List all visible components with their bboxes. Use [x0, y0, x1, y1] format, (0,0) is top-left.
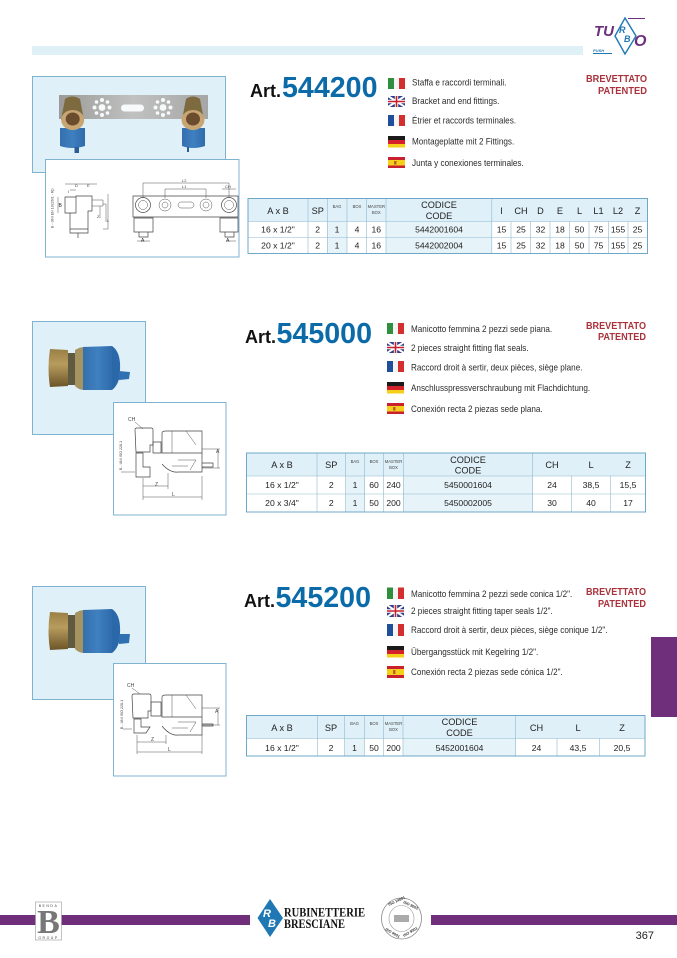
multilingual description: Manicotto femmina 2 pezzi sede conica 1/2". — [411, 589, 572, 599]
table: 544200 dimensions: 25 — [516, 240, 526, 250]
logo: Rubinetterie Bresciane: R — [263, 908, 271, 920]
article heading: 545200 — [276, 582, 371, 614]
table: 545200 dimensions: Z — [619, 723, 625, 733]
table: 544200 dimensions: 15 — [497, 224, 506, 234]
table: 544200 dimensions: 32 — [536, 240, 545, 250]
table: 545000 dimensions: 38,5 — [583, 480, 600, 490]
table: 545000 dimensions: MASTER — [385, 459, 402, 464]
table: 545200 dimensions: SP — [325, 723, 337, 733]
technical drawing panel: bracket: L — [107, 218, 110, 223]
table: 544200 dimensions: 50 — [575, 224, 584, 234]
table: 544200 dimensions: 20 x 1/2" — [261, 240, 295, 250]
technical drawing panel: taper fitting: L — [168, 747, 171, 753]
logo: B group: BENDA — [39, 904, 58, 908]
multilingual description: Manicotto femmina 2 pezzi sede piana. — [411, 324, 552, 334]
table: 544200 dimensions: Z — [635, 206, 641, 216]
table: 544200 dimensions: 75 — [594, 224, 603, 234]
table: 544200 dimensions: 5442002004 — [415, 240, 463, 250]
technical drawing panel: bracket: B — [58, 203, 62, 209]
logo: B group: GROUP — [38, 936, 59, 940]
table: 545000 dimensions: 20 x 3/4" — [265, 498, 299, 508]
table: 545000 dimensions — [246, 453, 646, 512]
technical drawing panel: bracket: L1 — [182, 184, 187, 189]
table: 545000 dimensions: CH — [545, 460, 559, 470]
table: 545000 dimensions: 1 — [353, 480, 358, 490]
multilingual description — [412, 77, 524, 168]
logo: Turbo Push: B — [624, 34, 631, 44]
table: 544200 dimensions: 32 — [536, 224, 545, 234]
multilingual description: Montageplatte mit 2 Fittings. — [412, 136, 514, 147]
table: 544200 dimensions: CODICE — [421, 200, 457, 210]
footer purple bar left — [0, 915, 250, 925]
multilingual description: Conexión recta 2 piezas sede cónica 1/2". — [411, 667, 563, 677]
flag: Italy — [387, 588, 404, 599]
patent label: BREVETTATO — [586, 586, 646, 598]
multilingual description — [411, 324, 590, 414]
technical drawing panel: bracket: D — [75, 183, 78, 188]
flag: UK — [388, 96, 405, 107]
table: 544200 dimensions: I — [500, 206, 503, 216]
logo: Rubinetterie Bresciane: B — [268, 918, 276, 930]
table: 544200 dimensions — [248, 198, 648, 254]
table: 545000 dimensions: BOX — [389, 465, 398, 470]
multilingual description: Conexión recta 2 piezas sede plana. — [411, 404, 543, 414]
section: Art. 545200 — [32, 582, 646, 776]
table: 545000 dimensions: 50 — [369, 498, 379, 508]
flag: Spain — [387, 403, 404, 414]
table: 544200 dimensions: 4 — [355, 224, 360, 234]
table: 545000 dimensions: BOX — [370, 459, 379, 464]
technical drawing panel: bracket — [46, 160, 239, 257]
logo: Turbo Push: PUSH — [593, 48, 604, 53]
table: 545000 dimensions: 5450001604 — [444, 480, 492, 490]
flag: France — [387, 624, 404, 636]
table: 544200 dimensions: 25 — [633, 224, 642, 234]
logo: Rubinetterie Bresciane — [258, 899, 365, 937]
photo panel: straight fitting — [32, 322, 146, 434]
table: 545200 dimensions: 24 — [532, 743, 541, 753]
photo panel: taper fitting — [32, 586, 146, 700]
table: 545200 dimensions: MASTER — [385, 721, 402, 726]
multilingual description: Staffa e raccordi terminali. — [412, 77, 506, 88]
technical drawing panel: bracket: L2 — [182, 178, 187, 183]
section: Art. 544200 — [32, 72, 648, 257]
patent label: PATENTED — [598, 331, 646, 343]
technical drawing panel: straight fitting: CH — [128, 417, 136, 423]
technical drawing panel: straight fitting: Z — [155, 482, 158, 488]
logo: Turbo Push: TU — [594, 23, 615, 40]
table: 544200 dimensions: SP — [312, 206, 324, 216]
table: 545000 dimensions: 16 x 1/2" — [265, 480, 299, 490]
multilingual description: Bracket and end fittings. — [412, 96, 499, 106]
multilingual description: 2 pieces straight fitting taper seals 1/2". — [411, 606, 553, 616]
flag: Spain — [388, 157, 405, 168]
table: 544200 dimensions: 16 x 1/2" — [261, 224, 295, 234]
table: 544200 dimensions: 25 — [516, 224, 526, 234]
technical drawing panel: bracket: CH — [225, 184, 231, 189]
patent label — [586, 586, 646, 610]
table: 545000 dimensions: CODICE — [450, 455, 486, 465]
table: 545000 dimensions: 17 — [623, 498, 633, 508]
table: 545200 dimensions: BOX — [370, 721, 379, 726]
table: 544200 dimensions: MASTER — [368, 204, 385, 209]
technical drawing panel: bracket: E — [87, 183, 90, 188]
article heading: Art. — [250, 81, 281, 101]
article heading: Art. — [244, 591, 275, 611]
table: 545200 dimensions: 43,5 — [570, 743, 587, 753]
table: 545000 dimensions: SP — [325, 460, 337, 470]
top header bar — [32, 46, 583, 55]
article heading: 545000 — [276, 318, 372, 350]
technical drawing panel: straight fitting: L — [172, 492, 175, 498]
table: 544200 dimensions: L1 — [593, 206, 604, 216]
patent label: PATENTED — [598, 598, 646, 610]
table: 544200 dimensions: 25 — [633, 240, 642, 250]
technical drawing panel: bracket: Z — [97, 214, 100, 219]
technical drawing panel: bracket: B - UNI EN 10226/1 - Rp — [50, 188, 54, 228]
logo: Rubinetterie Bresciane: RUBINETTERIE — [284, 906, 365, 920]
table: 545200 dimensions: BAG — [350, 721, 359, 726]
logo: ISO certification seal: ISO 9001 — [402, 926, 418, 938]
flag: UK — [387, 605, 404, 617]
patent label: PATENTED — [598, 85, 647, 97]
table: 545000 dimensions: 240 — [386, 480, 401, 490]
table: 544200 dimensions: 155 — [611, 224, 625, 234]
table: 544200 dimensions: E — [557, 206, 563, 216]
table: 545000 dimensions: 30 — [547, 498, 557, 508]
technical drawing panel: straight fitting: A — [216, 449, 220, 455]
technical drawing panel: taper fitting: Z — [151, 737, 154, 743]
page number: 367 — [636, 930, 654, 942]
table: 545200 dimensions: 1 — [352, 743, 357, 753]
logo: ISO certification seal: ISO 14001 — [388, 896, 406, 907]
flag: Germany — [387, 382, 404, 394]
patent label: BREVETTATO — [586, 320, 646, 332]
technical drawing panel: straight fitting: B - UNI ISO 228-1 — [119, 441, 123, 470]
article heading: 544200 — [282, 72, 378, 104]
section: Art. 545000 — [32, 318, 646, 515]
footer purple bar right — [431, 915, 677, 925]
multilingual description: Étrier et raccords terminales. — [412, 115, 516, 126]
table: 544200 dimensions: CH — [514, 206, 528, 216]
table: 544200 dimensions: 15 — [497, 240, 506, 250]
table: 545200 dimensions: A x B — [271, 723, 293, 733]
table: 544200 dimensions: BAG — [333, 204, 341, 209]
table: 545200 dimensions: CH — [530, 723, 543, 733]
logo: ISO certification seal — [382, 896, 422, 939]
table: 544200 dimensions: 2 — [315, 224, 320, 234]
table: 544200 dimensions: 18 — [555, 240, 565, 250]
technical drawing panel: bracket: I — [68, 189, 69, 194]
table: 545000 dimensions: 15,5 — [620, 480, 637, 490]
multilingual description: Raccord droit à sertir, deux pièces, siège plane. — [411, 362, 582, 373]
multilingual description: Raccord droit à sertir, deux pièces, siège conique 1/2". — [411, 625, 608, 635]
logo: Turbo Push: R — [619, 25, 626, 35]
table: 545200 dimensions: 50 — [369, 743, 379, 753]
logo: B group: B — [37, 904, 60, 941]
table: 545200 dimensions: L — [575, 723, 581, 733]
flag: Italy — [388, 78, 405, 89]
table: 544200 dimensions: CODE — [426, 211, 452, 221]
table: 544200 dimensions: 16 — [372, 240, 381, 250]
logo: Turbo Push: O — [634, 33, 647, 50]
multilingual description: 2 pieces straight fitting flat seals. — [411, 343, 529, 353]
table: 544200 dimensions: 16 — [372, 224, 381, 234]
table: 544200 dimensions: 155 — [611, 240, 625, 250]
table: 545200 dimensions: 16 x 1/2" — [265, 743, 299, 753]
table: 544200 dimensions: D — [537, 206, 544, 216]
technical drawing panel: taper fitting — [114, 664, 226, 776]
technical drawing panel: bracket: A — [141, 238, 145, 244]
table: 545200 dimensions: 20,5 — [614, 743, 631, 753]
patent label — [586, 73, 647, 97]
flag: Spain — [387, 666, 404, 678]
flag: UK — [387, 342, 404, 353]
flag: Italy — [387, 323, 404, 334]
table: 545000 dimensions: A x B — [271, 460, 293, 470]
table: 545000 dimensions: 2 — [329, 480, 334, 490]
multilingual description: Junta y conexiones terminales. — [412, 158, 524, 168]
technical drawing panel: taper fitting: B - UNI ISO 228-1 — [120, 700, 124, 729]
photo panel: bracket with fittings — [32, 76, 226, 172]
technical drawing panel: straight fitting — [114, 402, 226, 515]
table: 544200 dimensions: 1 — [335, 224, 340, 234]
logo: ISO certification seal: ISO 9001 — [384, 927, 400, 939]
multilingual description: Anschlusspressverschraubung mit Flachdichtung. — [411, 383, 590, 393]
table: 545200 dimensions: BOX — [389, 727, 398, 732]
table: 544200 dimensions: BOX — [372, 210, 381, 215]
table: 544200 dimensions: 18 — [555, 224, 565, 234]
technical drawing panel: taper fitting: A — [215, 709, 219, 715]
technical drawing panel: bracket: A — [226, 238, 230, 244]
table: 545000 dimensions: 1 — [353, 498, 358, 508]
purple side tab — [651, 637, 677, 717]
table: 545000 dimensions: 60 — [369, 480, 379, 490]
table: 545000 dimensions: L — [588, 460, 594, 470]
table: 544200 dimensions: A x B — [267, 206, 289, 216]
table: 545000 dimensions: 2 — [329, 498, 334, 508]
flag: Germany — [388, 136, 405, 148]
flag: France — [387, 361, 404, 372]
table: 545000 dimensions: 24 — [547, 480, 557, 490]
table: 544200 dimensions: 2 — [315, 240, 320, 250]
patent label — [586, 320, 646, 343]
table: 545000 dimensions: 5450002005 — [444, 498, 492, 508]
table: 544200 dimensions: 1 — [335, 240, 340, 250]
flag: Germany — [387, 646, 404, 658]
table: 545000 dimensions: CODE — [455, 466, 481, 476]
table: 545000 dimensions: Z — [625, 460, 631, 470]
table: 545000 dimensions: BAG — [351, 459, 359, 464]
patent label: BREVETTATO — [586, 73, 647, 85]
table: 544200 dimensions: BOX — [353, 204, 362, 209]
table: 544200 dimensions: L — [577, 206, 582, 216]
table: 545200 dimensions: CODE — [446, 728, 473, 738]
multilingual description — [411, 589, 608, 677]
multilingual description: Übergangsstück mit Kegelring 1/2". — [411, 647, 538, 657]
article heading: Art. — [245, 327, 276, 347]
logo: Rubinetterie Bresciane: BRESCIANE — [284, 917, 345, 931]
table: 545000 dimensions: 200 — [386, 498, 401, 508]
technical drawing panel: taper fitting: CH — [127, 683, 135, 689]
table: 544200 dimensions: 4 — [355, 240, 360, 250]
table: 545200 dimensions: 2 — [329, 743, 334, 753]
table: 545000 dimensions: 40 — [586, 498, 596, 508]
table: 545200 dimensions: CODICE — [442, 717, 477, 727]
table: 545200 dimensions — [246, 716, 645, 756]
flag: France — [388, 115, 405, 126]
table: 544200 dimensions: 5442001604 — [415, 224, 463, 234]
logo: Turbo Push — [593, 18, 647, 54]
table: 545200 dimensions: 200 — [386, 743, 401, 753]
logo: ISO certification seal: ISO 9001 — [403, 900, 419, 911]
table: 545200 dimensions: 5452001604 — [436, 743, 484, 753]
table: 544200 dimensions: L2 — [613, 206, 623, 216]
table: 544200 dimensions: 50 — [575, 240, 584, 250]
table: 544200 dimensions: 75 — [594, 240, 603, 250]
